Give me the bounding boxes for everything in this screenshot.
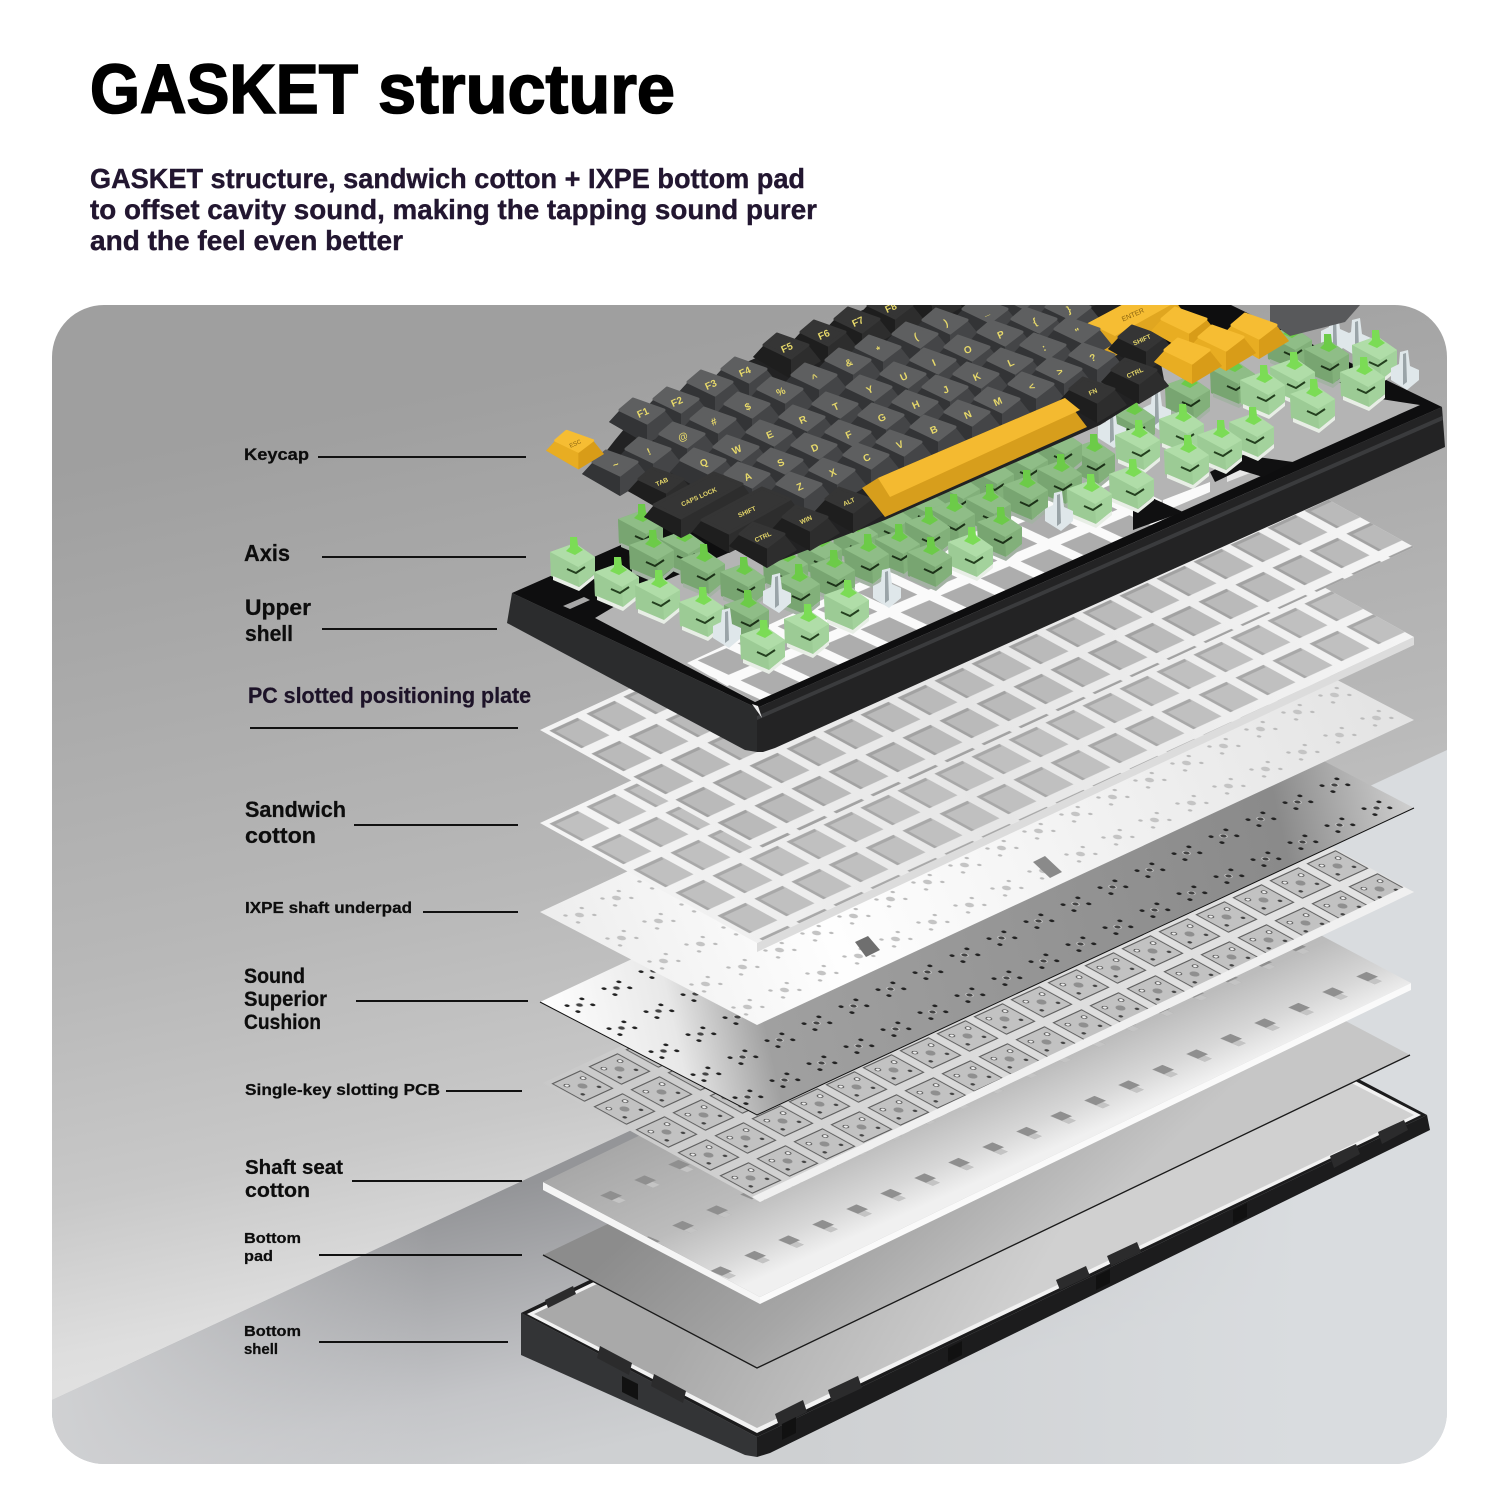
keycaps: TAB — [655, 477, 670, 488]
keycap block shadow — [590, 300, 1165, 565]
label: Sandwich cotton: Sandwich — [245, 797, 346, 822]
label: Upper shell — [245, 595, 497, 646]
subtitle: GASKET structure, sandwich cotton + IXPE bottom pad — [90, 163, 805, 194]
keycaps: $ — [743, 401, 753, 414]
keycaps: J — [941, 384, 951, 397]
label: Shaft seat cotton: Shaft seat — [245, 1157, 343, 1179]
keycaps: F3 — [704, 378, 719, 393]
keycaps: A — [743, 471, 754, 484]
keycap: grey numpad block — [1270, 305, 1360, 336]
keycaps: B — [929, 424, 940, 437]
keycaps: @ — [677, 430, 690, 444]
keycaps: C — [862, 452, 873, 465]
label: Bottom shell: Bottom — [244, 1323, 301, 1340]
keycaps: F5 — [780, 341, 795, 356]
keycaps: ! — [645, 447, 653, 458]
label: Sandwich cotton — [245, 797, 518, 848]
switches (axis) — [550, 313, 1419, 674]
keycaps: M — [992, 396, 1004, 409]
keycaps: CAPS LOCK — [680, 486, 718, 508]
subtitle — [90, 163, 817, 256]
keycaps: ALT — [842, 497, 856, 508]
label: Shaft seat cotton: cotton — [245, 1180, 310, 1202]
label: Upper shell: Upper — [245, 595, 311, 620]
keycaps: F2 — [670, 395, 685, 410]
keycaps: F6 — [817, 328, 832, 343]
keycaps: FN — [1088, 387, 1099, 397]
keycaps: } — [1065, 305, 1073, 316]
keycap: yellow arrows — [1151, 308, 1289, 384]
label: Sandwich cotton: cotton — [245, 823, 316, 848]
label: Shaft seat cotton — [245, 1157, 522, 1202]
keycaps: G — [876, 412, 888, 425]
keycaps: CTRL — [1126, 367, 1145, 380]
background card — [52, 248, 1447, 1464]
keycaps: ? — [1088, 352, 1098, 365]
keycaps: * — [875, 345, 883, 356]
keycaps: Q — [698, 457, 710, 470]
keycaps: F8 — [884, 301, 899, 316]
floor backdrop — [52, 750, 1447, 1464]
bottom pad — [542, 1022, 1410, 1369]
keycaps: < — [1027, 381, 1037, 394]
keycaps: { — [1031, 317, 1039, 328]
keycaps: X — [828, 467, 839, 480]
keycaps: SHIFT — [737, 505, 757, 519]
keycaps: CTRL — [754, 531, 773, 544]
keycaps: " — [1074, 326, 1083, 338]
bottom shell — [521, 1080, 1430, 1457]
label: Sound Superior Cushion: Cushion — [244, 1011, 321, 1034]
keycaps: N — [963, 409, 974, 422]
label: Sound Superior Cushion: Sound — [244, 965, 305, 988]
keycaps: ~ — [611, 459, 621, 472]
keycaps: Z — [795, 481, 805, 494]
keycaps: Y — [865, 384, 876, 397]
sound superior cushion — [540, 762, 1414, 1116]
keycaps: K — [972, 371, 983, 384]
keycaps: U — [899, 371, 910, 384]
keycaps: T — [831, 401, 841, 414]
label: Sound Superior Cushion — [244, 965, 528, 1034]
keycaps: O — [962, 344, 974, 357]
keycaps: : — [1040, 343, 1048, 354]
PC slotted positioning plate — [540, 476, 1414, 848]
sandwich cotton — [540, 588, 1414, 952]
keycaps: I — [931, 358, 938, 369]
single-key slotting PCB — [551, 847, 1414, 1202]
keycaps — [546, 305, 1360, 568]
keycaps: & — [844, 357, 855, 370]
keycaps: F1 — [636, 406, 651, 421]
keycaps: W — [731, 443, 744, 457]
keycaps: S — [776, 457, 787, 470]
keycaps: P — [996, 329, 1007, 342]
upper shell — [507, 290, 1445, 752]
floor light falloff right — [1042, 750, 1447, 1464]
title: structure — [378, 50, 675, 128]
keycaps: SHIFT — [1132, 333, 1152, 347]
keycaps: > — [1055, 366, 1065, 379]
keycaps: V — [895, 439, 906, 452]
exploded keyboard layers — [507, 248, 1445, 1457]
label: Bottom shell — [244, 1323, 508, 1358]
keycaps: ENTER — [1121, 307, 1145, 323]
label: IXPE shaft underpad: IXPE shaft underpad — [245, 900, 412, 917]
subtitle: to offset cavity sound, making the tapping sound purer — [90, 194, 817, 225]
keycap: yellow ESC — [546, 431, 604, 469]
label: Upper shell: shell — [245, 621, 293, 646]
keycaps: % — [775, 386, 788, 399]
keycap: yellow ESC: ESC — [569, 439, 583, 450]
keycaps: F — [844, 429, 854, 442]
keycaps: F7 — [851, 315, 866, 330]
keycaps: ^ — [810, 372, 820, 385]
keycaps: E — [765, 429, 776, 442]
keycaps: # — [709, 416, 719, 429]
subtitle: and the feel even better — [90, 225, 403, 256]
keycaps: R — [798, 414, 809, 427]
label: Bottom pad: Bottom — [244, 1230, 301, 1247]
floor light falloff left — [52, 1252, 371, 1464]
keycaps: ) — [942, 318, 950, 329]
keycaps: ( — [912, 331, 921, 343]
wall backdrop — [52, 305, 1447, 1400]
title: GASKET — [90, 50, 358, 128]
keycap: yellow space bar — [862, 398, 1087, 517]
label: Sound Superior Cushion: Superior — [244, 988, 327, 1011]
title — [90, 50, 675, 128]
label: Single-key slotting PCB: Single-key slotting PCB — [245, 1082, 440, 1099]
label: PC slotted positioning plate: PC slotted positioning plate — [248, 683, 531, 708]
keycaps: _ — [981, 306, 991, 319]
keycaps: F4 — [738, 365, 753, 380]
label: Keycap: Keycap — [244, 445, 309, 464]
keycaps: D — [810, 442, 821, 455]
label: Bottom shell: shell — [244, 1341, 278, 1358]
IXPE shaft underpad — [540, 676, 1414, 1025]
label: Axis: Axis — [244, 540, 290, 566]
shaft seat cotton — [543, 936, 1411, 1304]
keycaps: L — [1006, 357, 1016, 370]
keycaps: WIN — [799, 515, 814, 526]
label: Bottom pad — [244, 1230, 522, 1265]
label: Bottom pad: pad — [244, 1248, 273, 1265]
keycaps: H — [911, 399, 922, 412]
